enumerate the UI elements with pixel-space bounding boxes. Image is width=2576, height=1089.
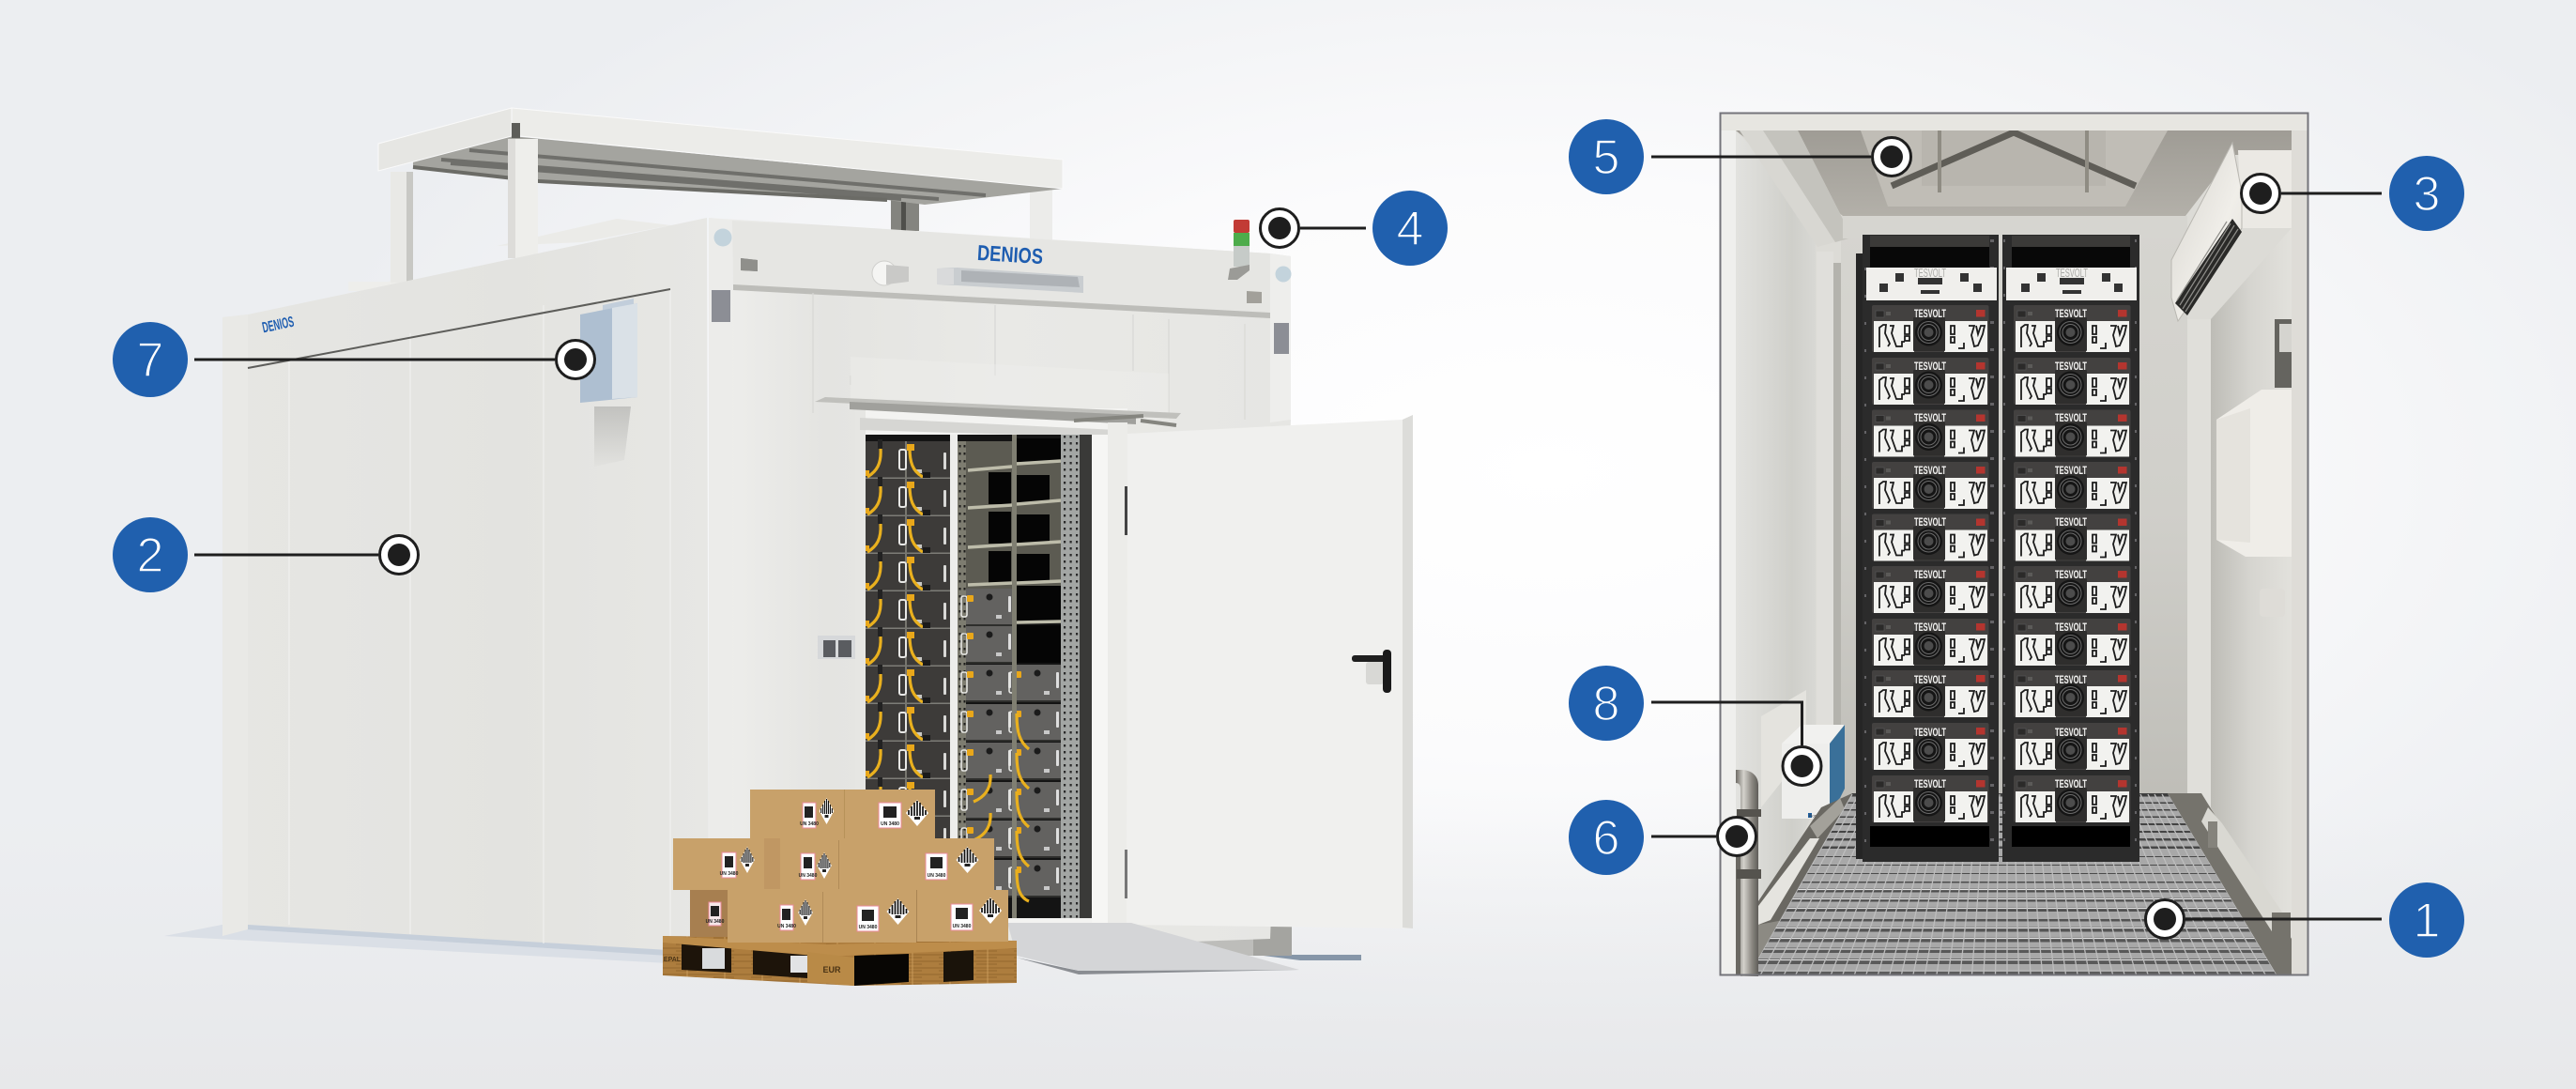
seam panel [851,357,1169,420]
module brand labels: TESVOLT [1914,621,1946,634]
hazard labels [706,798,1002,931]
wall switch [818,636,855,659]
condenser unit [1761,690,1845,819]
module brand labels: TESVOLT [1914,515,1946,529]
controller units: TESVOLT [1914,266,1946,280]
interior frame base [1720,113,2308,975]
module brand labels: TESVOLT [2055,621,2087,634]
canopy posts [391,172,413,283]
signal tower [1228,220,1250,280]
hazard labels: UN 3480 [953,924,972,929]
floor rails [1736,793,2292,976]
left side wall [1736,130,1841,974]
motion sensor [872,261,909,285]
hazard labels: UN 3480 [720,871,739,877]
callout 7: 7 [137,333,163,388]
wall ventilation grille [580,299,637,467]
air conditioner [2171,143,2292,321]
module brand labels: TESVOLT [2055,726,2087,739]
pallet: EPAL [664,957,682,963]
wall button [2260,589,2285,617]
cardboard boxes with hazard labels [673,790,1008,943]
module brand labels: TESVOLT [2055,360,2087,373]
callout 5: 5 [1593,130,1619,185]
module brand labels: TESVOLT [2055,411,2087,424]
hazard labels: UN 3480 [799,873,818,879]
perforated upright [1061,435,1080,918]
module brand labels: TESVOLT [1914,673,1946,686]
logo: DENIOS front: DENIOS [976,240,1044,268]
module brand labels: TESVOLT [2055,464,2087,477]
callout 1: 1 [2414,894,2440,948]
interior panel border [1720,113,2308,974]
door leaf [1125,415,1413,928]
box stack [673,790,1008,943]
callout 4 [1260,191,1448,266]
module brand labels: TESVOLT [1914,568,1946,581]
right corner post [1270,253,1291,422]
ceiling [1736,130,2292,247]
callout 4: 4 [1397,202,1423,256]
roof hatch struts [1892,132,2136,186]
exterior lamp [937,268,1083,293]
callout 3 [2242,156,2464,231]
hazard labels: UN 3480 [706,919,725,925]
condenser unit: Rosenberg [1809,813,1831,819]
callout 6: 6 [1593,811,1619,866]
battery modules right [2014,305,2131,822]
callout 8: 8 [1593,677,1619,731]
callout 3: 3 [2414,167,2440,222]
callout 2 [113,517,419,592]
floor grating [1746,793,2281,974]
callout 1 [2146,882,2464,958]
drain pipe [1736,770,1761,976]
loading ramp [1007,923,1299,974]
callout 6 [1569,800,1756,875]
controller units: TESVOLT [2056,266,2088,280]
rear roof unit [497,219,671,246]
front corner post [709,218,732,959]
battery racks inside opening [866,435,1092,929]
module brand labels: TESVOLT [1914,307,1946,320]
module brand labels: TESVOLT [1914,360,1946,373]
hazard labels: UN 3480 [777,924,796,929]
module brand labels: TESVOLT [2055,307,2087,320]
callout 2: 2 [137,529,163,583]
battery modules left [1872,305,1988,822]
pallet [663,936,1017,986]
module brand labels: TESVOLT [1914,464,1946,477]
back wall [1841,216,2187,807]
canopy underside slats [413,136,1063,205]
panel: interior view of the container [1720,113,2308,976]
callout 5 [1569,119,1911,194]
module brand labels: TESVOLT [2055,515,2087,529]
callout 7 [113,322,595,397]
distribution cabinet [2216,319,2292,557]
rack modules column A [866,439,950,838]
hazard labels: UN 3480 [800,821,819,827]
door frame, opening and canopy [815,397,1181,929]
callout 8 [1569,666,1821,785]
roof canopy [348,108,1063,291]
module brand labels: TESVOLT [2055,777,2087,790]
controller units [1866,266,2137,300]
panel: exterior view of the container [164,108,1413,986]
hazard labels: UN 3480 [881,821,899,827]
right side wall [2187,228,2292,974]
front wall [709,218,1292,959]
left wall [222,218,758,959]
module brand labels: TESVOLT [1914,726,1946,739]
battery racks [1856,235,2139,862]
floor shadow and base strip [164,920,1361,963]
rack shelving, upper centre [958,438,1061,838]
canopy deck [378,108,512,171]
rack modules column B [961,435,1061,918]
module brand labels: TESVOLT [2055,568,2087,581]
roof band line [248,289,670,368]
door handle [1352,650,1391,693]
hazard labels: UN 3480 [928,873,946,879]
hazard labels: UN 3480 [859,925,878,930]
module brand labels: TESVOLT [2055,673,2087,686]
module brand labels: TESVOLT [1914,777,1946,790]
module brand labels: TESVOLT [1914,411,1946,424]
module brand labels [1914,307,2087,790]
rack frames [1856,235,2139,862]
pallet: EUR [822,965,841,974]
top fascia band [732,221,1270,316]
logo: DENIOS side: DENIOS [261,314,296,336]
frame posts [1720,113,2308,975]
